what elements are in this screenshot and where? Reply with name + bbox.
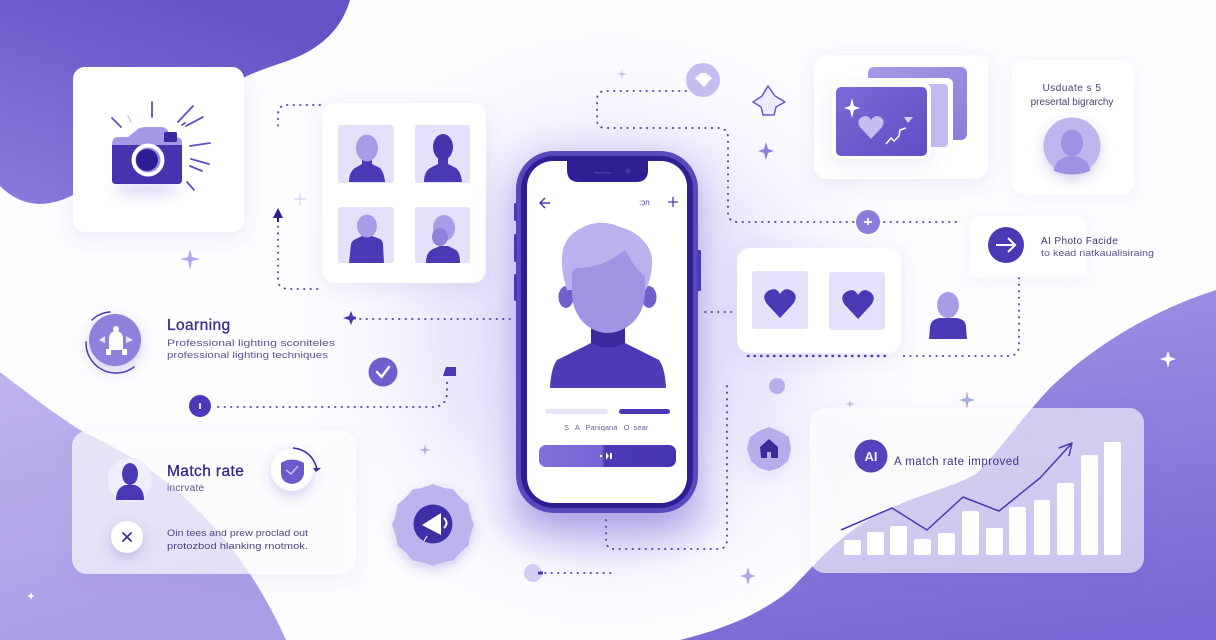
portrait tile 1 [338, 125, 394, 183]
AI badge: AI [864, 449, 878, 464]
match rate description line 2: protozbod hlanking rnotmok. [167, 541, 308, 552]
icon: x circle [111, 521, 143, 553]
phone top label: :ɔn [639, 198, 650, 207]
match rate subtext: incrvate [167, 483, 205, 494]
icon: standing person [929, 292, 967, 339]
phone notch [567, 160, 648, 182]
background blob: top left [0, 0, 350, 204]
portrait avatar [550, 223, 666, 388]
icon: up arrow [273, 208, 283, 222]
phone side buttons [514, 203, 701, 301]
panel: update profile [1012, 60, 1134, 195]
background glow [270, 0, 950, 640]
chart title: A match rate improved [894, 456, 1020, 468]
icon: faint plus [294, 193, 306, 205]
match rate description: Oin tees and prew proclad out [167, 528, 308, 539]
panel: camera [73, 67, 244, 232]
sparkles [27, 61, 1176, 600]
icon: check circle [368, 358, 398, 386]
AI badge [854, 440, 888, 472]
background blob: bottom right [680, 290, 1216, 640]
panel: AI photo [970, 216, 1154, 277]
learning description line 2: professional lighting techniques [167, 350, 328, 361]
panel: photo stack [814, 55, 988, 179]
portrait tile 2 [415, 125, 470, 183]
icon: check badge [271, 448, 321, 491]
learning block [86, 312, 335, 373]
heart tile 2 [829, 272, 885, 330]
node: connector circle [856, 210, 880, 234]
node: bottom circle [524, 564, 543, 582]
panel: match rate [72, 431, 356, 574]
panel: hearts [737, 248, 901, 353]
panel: portraits [322, 103, 486, 283]
icon: plane [343, 311, 356, 325]
portrait tile 4 [415, 207, 470, 263]
icon: learning badge [86, 312, 141, 373]
icon: outline star [753, 86, 785, 115]
phone screen [527, 161, 687, 503]
node: small dot [769, 378, 785, 394]
photo back layer [868, 67, 967, 140]
plus icon [668, 197, 678, 207]
node: top diamond circle [686, 63, 720, 97]
portrait tile 3 [338, 207, 394, 263]
panel: match chart [810, 408, 1144, 573]
icon: arrow circle [988, 227, 1024, 263]
icon: flag marker [443, 367, 456, 376]
phone action button [539, 445, 676, 467]
heading: match rate: Match rate [167, 463, 244, 480]
icon: profile avatar [1044, 118, 1100, 174]
background blob: bottom left [0, 372, 286, 640]
phone [514, 151, 701, 513]
photo front layer [832, 83, 931, 159]
AI photo heading: AI Photo Facide [1041, 236, 1118, 247]
dotted connectors [218, 91, 1019, 573]
heart tile 1 [752, 271, 808, 329]
progress bars [545, 409, 670, 414]
update subtext: presertal bigrarchy [1031, 97, 1113, 108]
learning description: Professional lighting sconiteles [167, 338, 335, 349]
bar chart [844, 442, 1121, 555]
icon: step circle [189, 395, 211, 417]
trend line arrow [841, 443, 1072, 530]
icon: camera [112, 102, 210, 195]
photo middle layer [855, 78, 953, 152]
heading: learning: Loarning [167, 317, 231, 334]
icon: home badge [747, 427, 791, 471]
phone caption: S A Paniqana O sear [564, 423, 649, 432]
AI photo subtext: to kead natkaualisiraing [1041, 248, 1154, 259]
phone under glow [503, 480, 713, 550]
back arrow [540, 198, 550, 208]
icon: megaphone badge [392, 484, 474, 566]
icon: person avatar [108, 458, 152, 502]
update heading: Usduate s 5 [1043, 83, 1101, 94]
